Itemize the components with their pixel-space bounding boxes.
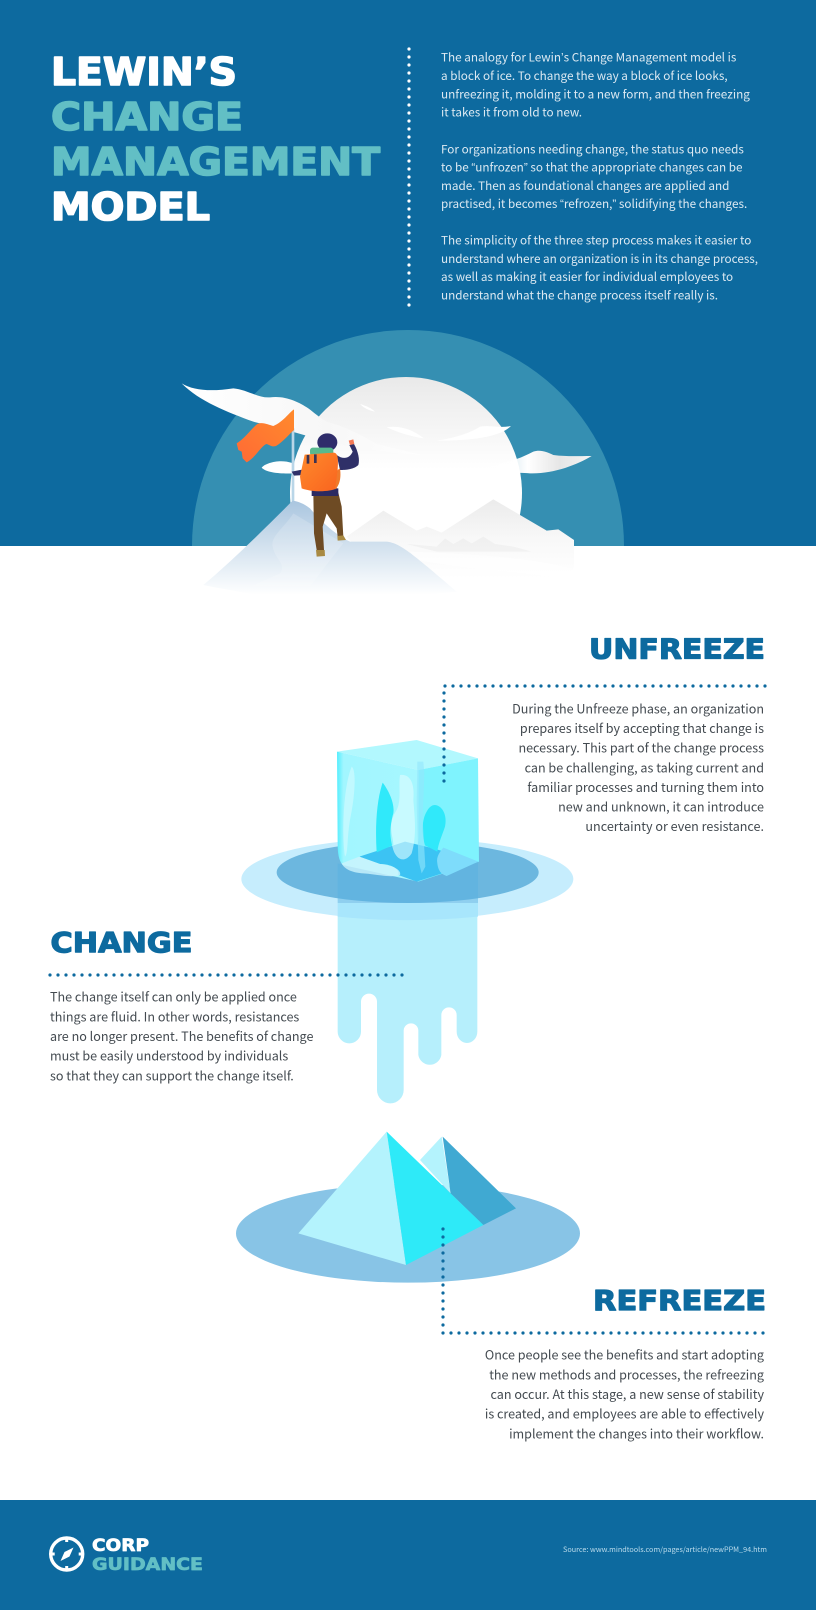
intro text: For organizations needing change, the status quo needs <box>441 140 744 157</box>
illustration: climber on mountain <box>182 330 624 601</box>
intro text: as well as making it easier for individual employees to <box>441 268 733 285</box>
unfreeze text: new and unknown, it can introduce <box>558 796 764 816</box>
change text: The change itself can only be applied once <box>50 987 297 1006</box>
intro text: a block of ice. To change the way a block of ice looks, <box>441 67 728 84</box>
unfreeze text: prepares itself by accepting that change is <box>520 718 764 737</box>
title <box>51 50 380 229</box>
dotted connector: refreeze <box>443 1229 765 1333</box>
footer <box>0 1500 816 1610</box>
title: CHANGE <box>51 95 243 139</box>
drip <box>338 877 477 1103</box>
icon: compass <box>51 1538 83 1570</box>
ground haze <box>410 552 574 578</box>
intro text: it takes it from old to new. <box>441 104 582 121</box>
inner puddle <box>277 842 539 903</box>
climber <box>292 433 359 557</box>
heading: change: CHANGE <box>50 926 192 959</box>
logo text: CORP <box>92 1536 149 1555</box>
left cloud <box>182 383 423 455</box>
front pyramid <box>298 1132 406 1265</box>
unfreeze text: uncertainty or even resistance. <box>585 816 764 835</box>
unfreeze text <box>512 698 764 835</box>
backdrop circle <box>192 330 624 546</box>
title: MODEL <box>51 185 210 229</box>
refreeze text: implement the changes into their workflow. <box>509 1423 764 1442</box>
intro text <box>441 49 758 303</box>
ice cube <box>337 740 478 770</box>
header background <box>0 0 816 546</box>
change text: are no longer present. The benefits of change <box>50 1026 313 1045</box>
title: MANAGEMENT <box>51 140 380 184</box>
change text: so that they can support the change itself. <box>50 1065 294 1084</box>
source: Source: www.mindtools.com/pages/article/newPPM_94.htm <box>563 1545 767 1555</box>
intro text: practised, it becomes “refrozen,” solidifying the changes. <box>441 195 747 212</box>
flag pole <box>292 428 294 502</box>
dotted connector: unfreeze <box>444 686 765 787</box>
refreeze text: the new methods and processes, the refreezing <box>489 1364 764 1383</box>
intro text: to be “unfrozen” so that the appropriate changes can be <box>441 159 743 176</box>
title: LEWIN’S <box>51 50 237 94</box>
logo text: GUIDANCE <box>92 1555 203 1574</box>
logo text <box>92 1536 203 1574</box>
illustration: refrozen ice pyramids <box>236 1132 580 1283</box>
refreeze text <box>485 1344 764 1442</box>
intro text: understand where an organization is in its change process, <box>441 250 758 267</box>
dotted connector: change <box>50 973 403 977</box>
intro text: understand what the change process itself really is. <box>441 286 718 303</box>
unfreeze text: familiar processes and turning them into <box>527 777 764 796</box>
change text: things are fluid. In other words, resistances <box>50 1006 299 1025</box>
back pyramid <box>420 1137 451 1193</box>
puddle <box>236 1184 580 1283</box>
refreeze text: Once people see the benefits and start adopting <box>485 1344 764 1364</box>
heading: refreeze: REFREEZE <box>593 1284 766 1317</box>
intro text: unfreezing it, molding it to a new form, and then freezing <box>441 85 750 102</box>
right cloud <box>463 451 592 474</box>
flag <box>237 409 294 462</box>
change text: must be easily understood by individuals <box>50 1046 288 1065</box>
unfreeze text: During the Unfreeze phase, an organization <box>512 698 764 717</box>
intro text: made. Then as foundational changes are applied and <box>441 177 729 194</box>
illustration: melting ice block <box>241 740 573 1103</box>
outer puddle <box>241 838 573 920</box>
heading: unfreeze: UNFREEZE <box>589 632 765 666</box>
refreeze text: is created, and employees are able to effectively <box>485 1404 764 1423</box>
mountain peak <box>203 501 457 601</box>
small clouds <box>437 426 511 441</box>
refreeze text: can occur. At this stage, a new sense of stability <box>490 1384 764 1403</box>
trees <box>407 537 532 552</box>
intro text: The analogy for Lewin’s Change Management model is <box>441 49 737 66</box>
change text <box>50 987 313 1084</box>
dotted divider: header <box>407 49 411 306</box>
distant mountains <box>347 499 574 578</box>
intro text: The simplicity of the three step process makes it easier to <box>441 232 751 248</box>
unfreeze text: can be challenging, as taking current and <box>525 757 764 776</box>
unfreeze text: necessary. This part of the change process <box>518 738 764 757</box>
sun <box>290 377 522 546</box>
